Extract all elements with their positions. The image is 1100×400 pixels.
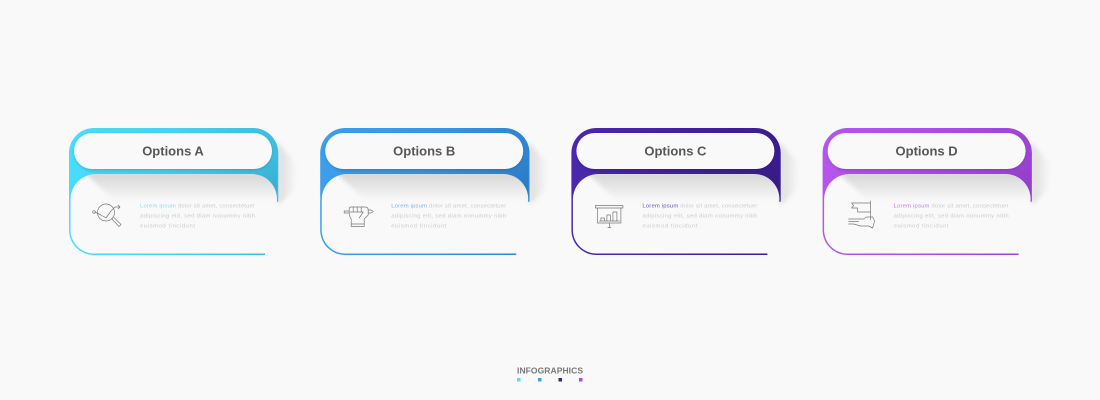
- description C: [642, 204, 757, 230]
- colored frame D: [823, 128, 1032, 255]
- panel: Options D: [823, 128, 1051, 255]
- legend square B: [538, 378, 542, 382]
- footer title: INFOGRAPHICS: [517, 366, 583, 376]
- right cast shadow A: [277, 142, 297, 205]
- legend square A: [517, 378, 520, 382]
- legend square C: [558, 378, 562, 382]
- heading B: Options B: [393, 144, 455, 158]
- right cast shadow B: [528, 142, 548, 205]
- header pill A: [74, 133, 272, 169]
- icon: fist holding pencil: [344, 207, 373, 226]
- header pill D: [828, 133, 1026, 169]
- description D: [894, 204, 1009, 230]
- band under pill B: [335, 158, 528, 199]
- description B: euismod tincidunt: [391, 224, 447, 230]
- legend square D: [579, 378, 582, 382]
- band under pill A: [84, 158, 277, 199]
- band under pill C: [586, 158, 779, 199]
- colored frame C: [571, 128, 781, 255]
- lower panel shadow B: [335, 172, 527, 204]
- description A: Lorem ipsum dolor sit amet, consectetuer: [140, 204, 255, 210]
- description C: euismod tincidunt: [642, 224, 698, 230]
- description B: adipiscing elit, sed diam nonummy nibh: [391, 214, 506, 220]
- header pill B: [325, 133, 523, 169]
- description C: Lorem ipsum dolor sit amet, consectetuer: [642, 204, 757, 210]
- colored frame A: [69, 128, 278, 255]
- panel: Options A: [69, 128, 297, 255]
- description A: euismod tincidunt: [140, 224, 195, 230]
- footer logo: [517, 366, 583, 382]
- right cast shadow C: [779, 142, 799, 205]
- colored frame B: [320, 128, 530, 255]
- description C: adipiscing elit, sed diam nonummy nibh: [642, 214, 757, 220]
- icon: hand holding flag: [849, 201, 875, 228]
- description D: adipiscing elit, sed diam nonummy nibh: [894, 214, 1009, 220]
- lower panel shadow C: [586, 172, 778, 204]
- band under pill D: [838, 158, 1031, 199]
- description A: adipiscing elit, sed diam nonummy nibh: [140, 214, 255, 220]
- description D: Lorem ipsum dolor sit amet, consectetuer: [894, 204, 1009, 210]
- icon: presentation board: [595, 206, 623, 228]
- heading D: Options D: [896, 144, 958, 158]
- lower panel shadow D: [838, 172, 1030, 204]
- description A: [140, 204, 255, 230]
- heading C: Options C: [644, 144, 707, 158]
- icon: magnifier with chart: [93, 204, 121, 226]
- lower panel shadow A: [84, 172, 276, 204]
- right cast shadow D: [1031, 142, 1051, 205]
- panel: Options B: [320, 128, 548, 255]
- description D: euismod tincidunt: [894, 224, 949, 230]
- description B: [391, 204, 506, 230]
- panel: Options C: [571, 128, 799, 255]
- heading A: Options A: [142, 144, 204, 158]
- header pill C: [576, 133, 774, 169]
- description B: Lorem ipsum dolor sit amet, consectetuer: [391, 204, 506, 210]
